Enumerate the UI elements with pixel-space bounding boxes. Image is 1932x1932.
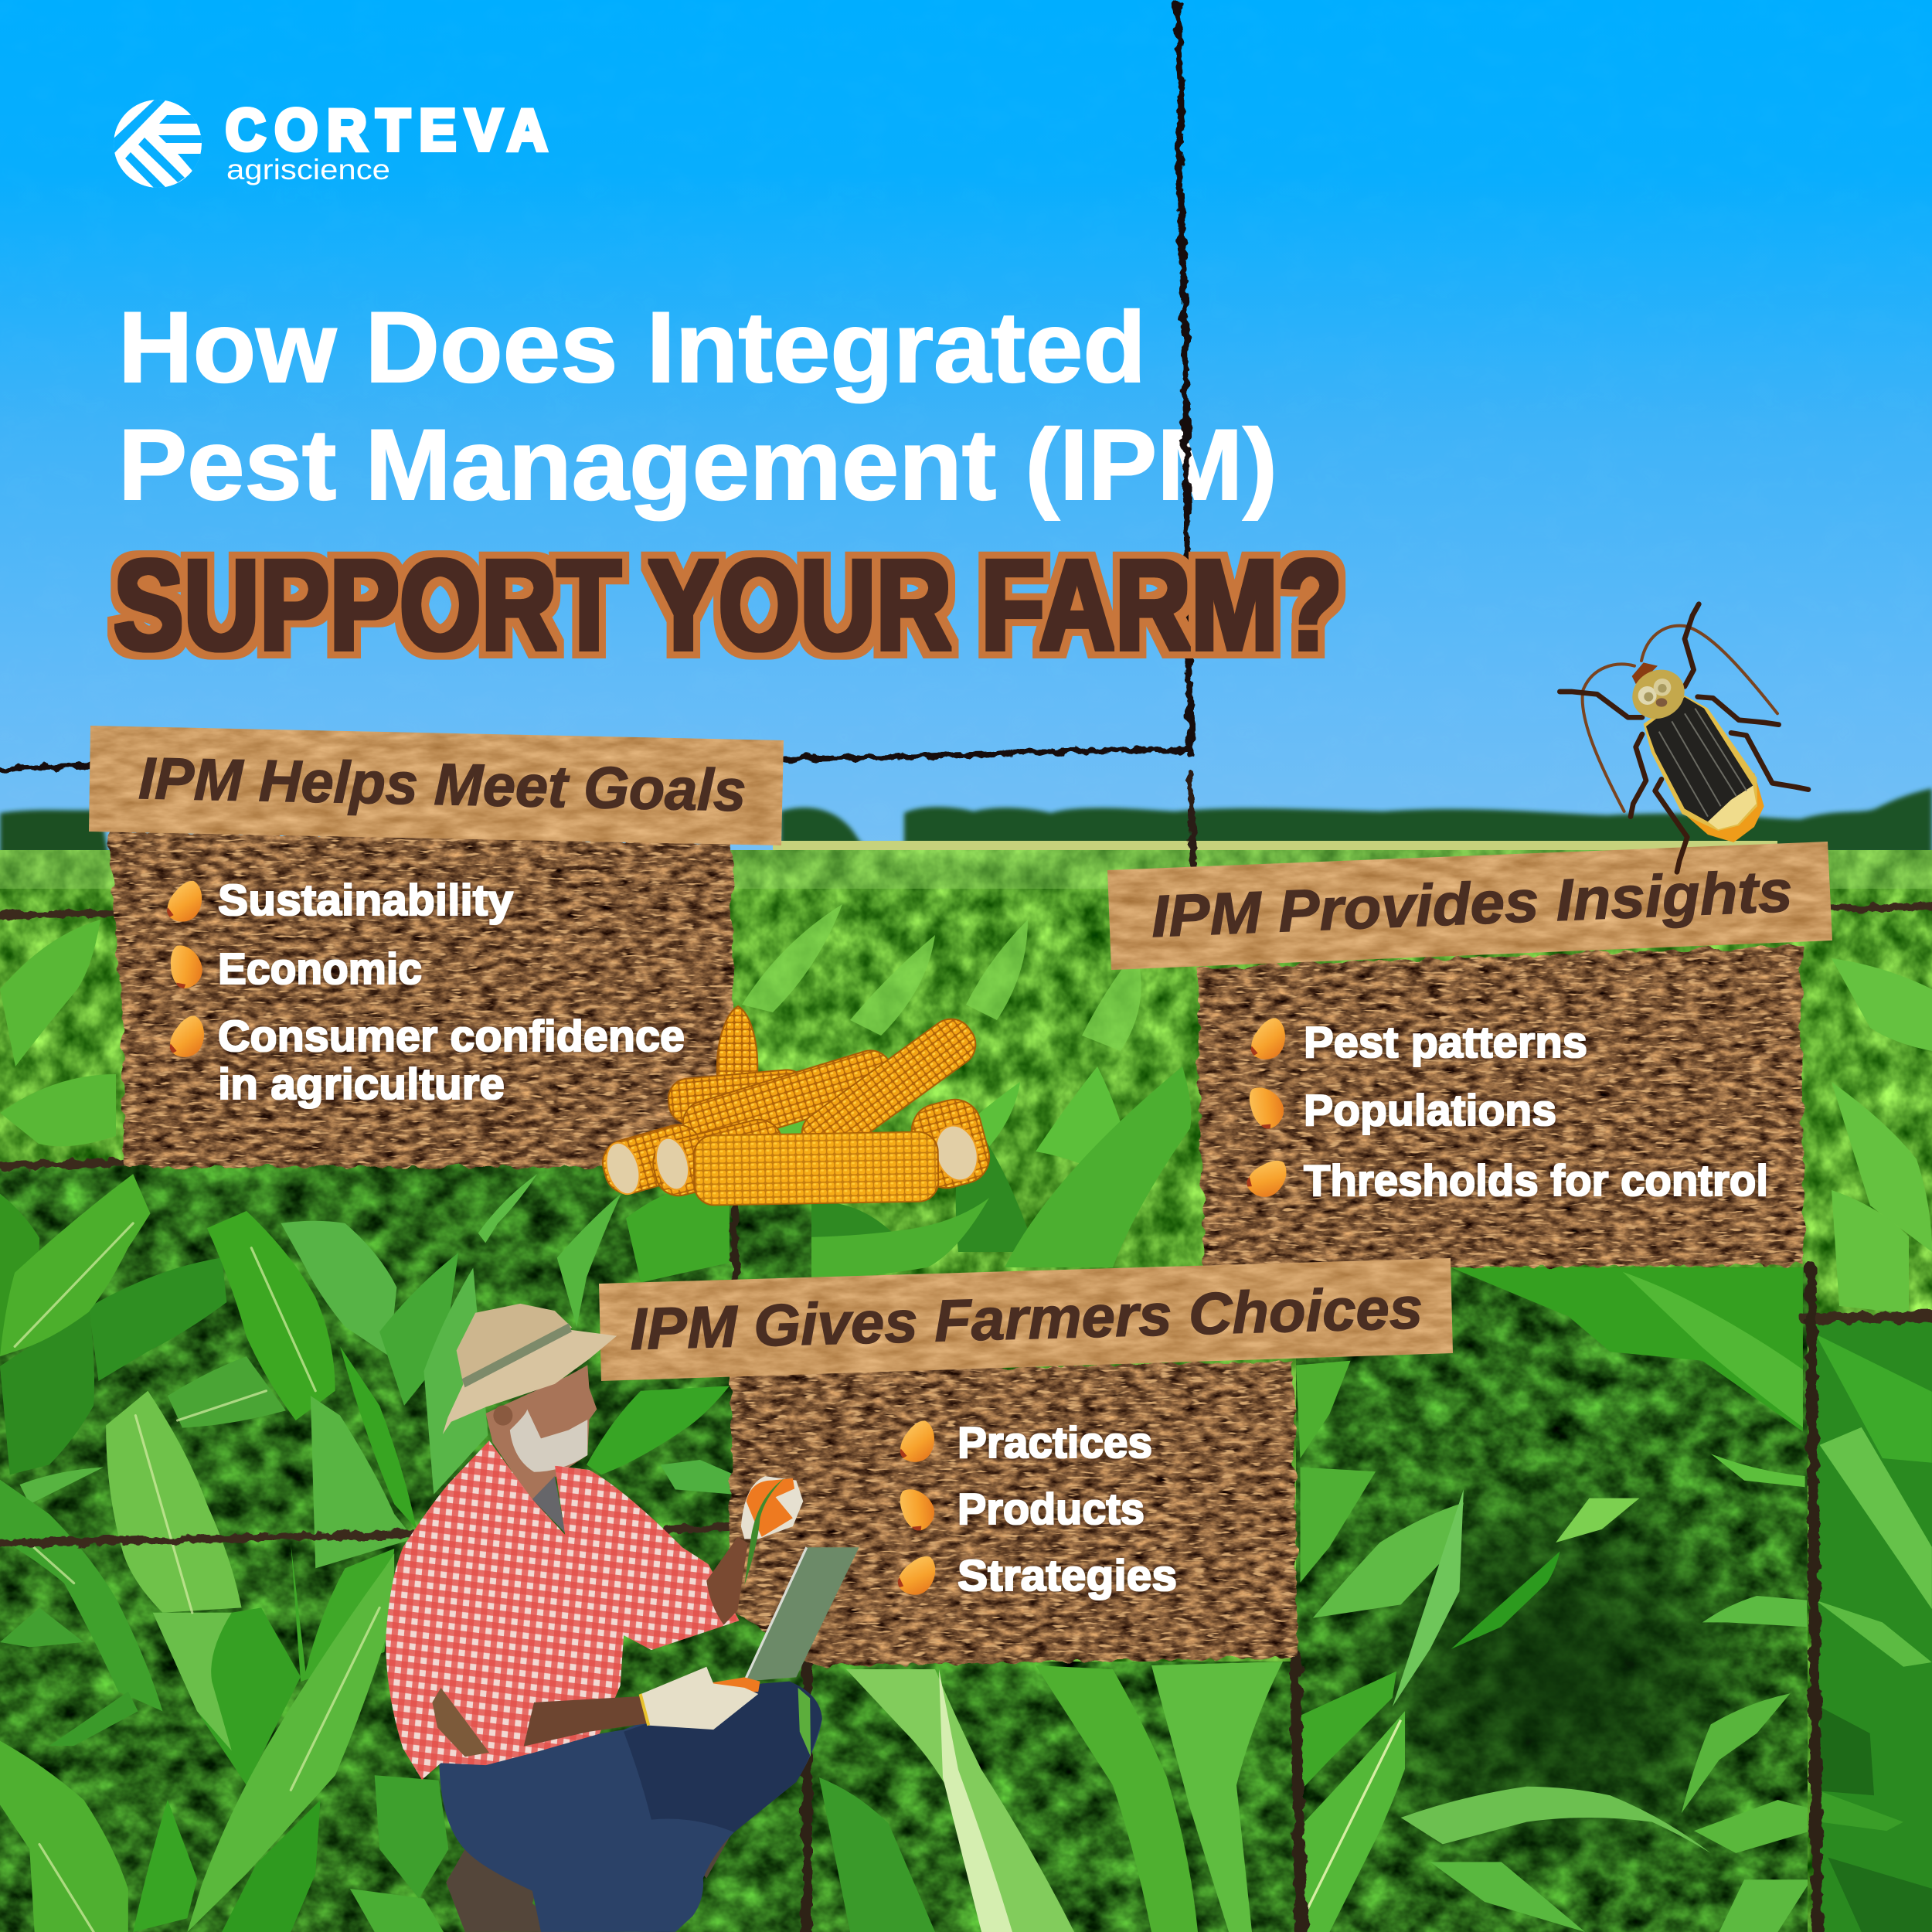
neck and face	[486, 1366, 597, 1502]
item text: Practices	[957, 1418, 1152, 1468]
cardboard heading: IPM Helps Meet Goals	[138, 746, 747, 824]
icon: corn kernel	[164, 876, 208, 927]
CORTEVA wordmark: CORTEVA	[226, 98, 547, 162]
item text: Populations	[1304, 1086, 1556, 1135]
trousers	[439, 1682, 822, 1932]
icon: corn kernel	[1240, 1080, 1291, 1133]
work glove	[641, 1667, 758, 1730]
panel: IPM Provides Insights	[1107, 842, 1832, 1269]
raised glove and leaf	[741, 1476, 803, 1585]
pale corn leaf	[846, 1669, 1074, 1932]
corn cobs pile	[597, 1006, 995, 1206]
icon: corn kernel	[167, 1012, 209, 1061]
cardboard heading	[1107, 842, 1832, 970]
ear	[493, 1406, 512, 1426]
cardboard heading	[599, 1258, 1453, 1381]
title: How Does Integrated	[118, 291, 1146, 403]
legs	[1560, 604, 1808, 872]
soil board	[1196, 946, 1804, 1269]
leaf midribs	[15, 1223, 379, 1932]
green leaf on knee	[798, 1688, 811, 1757]
head	[1632, 662, 1658, 684]
torn black seams	[0, 750, 1932, 1932]
icon: corn kernel	[894, 1549, 943, 1602]
item text: Sustainability	[218, 876, 513, 925]
logo mark	[111, 100, 205, 188]
lower forearm	[524, 1696, 648, 1747]
icon: corn kernel	[1248, 1014, 1290, 1063]
title: Pest Management (IPM)	[118, 408, 1277, 521]
vertical sky seam	[1177, 0, 1191, 757]
boots	[446, 1805, 733, 1932]
elbow patch	[432, 1688, 489, 1757]
wing covers	[1644, 696, 1757, 831]
field horizontal seams	[0, 906, 1932, 1543]
far field strip	[773, 841, 1777, 852]
item text: Consumer confidence	[218, 1012, 685, 1061]
cardboard heading	[89, 726, 784, 845]
right strip leaves	[1815, 1320, 1932, 1932]
logo	[111, 98, 547, 188]
field vertical seams	[734, 773, 1818, 1932]
corn field base	[0, 846, 1932, 1932]
farmer	[386, 1304, 859, 1932]
top field leaves	[0, 904, 1932, 1314]
icon: corn kernel	[1243, 1151, 1294, 1205]
item text: Thresholds for control	[1304, 1156, 1768, 1206]
item text: Products	[957, 1485, 1145, 1534]
bottom left large leaves	[0, 1163, 811, 1932]
title highlight: SUPPORT YOUR FARM?	[114, 534, 1342, 677]
title	[118, 291, 1277, 521]
sky horizontal seams	[0, 750, 1189, 769]
cardboard heading: IPM Provides Insights	[1150, 859, 1794, 950]
icon: corn kernel	[897, 1417, 939, 1466]
bottom middle leaves	[804, 1662, 1298, 1932]
shirt	[386, 1440, 740, 1780]
panel: IPM Gives Farmers Choices	[599, 1258, 1453, 1666]
sky background	[0, 0, 1932, 858]
soil board	[730, 1362, 1298, 1666]
leaf cluster left	[0, 1174, 734, 1932]
panel: IPM Helps Meet Goals	[89, 726, 784, 1167]
grey undershirt	[532, 1476, 565, 1532]
bottom right leaves	[1296, 1267, 1811, 1932]
laptop	[706, 1547, 859, 1692]
pronotum	[1624, 660, 1693, 728]
agriscience wordmark: agriscience	[226, 154, 390, 185]
icon: corn kernel	[162, 940, 209, 992]
abdomen tip	[1687, 773, 1764, 842]
raised forearm	[706, 1537, 748, 1625]
item text: Pest patterns	[1304, 1018, 1587, 1067]
item text: Economic	[218, 944, 422, 994]
beard	[510, 1409, 587, 1472]
antennae	[1583, 626, 1777, 811]
beetle	[1560, 604, 1808, 872]
sun hat	[443, 1304, 617, 1434]
cardboard heading: IPM Gives Farmers Choices	[629, 1275, 1423, 1362]
soil board	[108, 831, 734, 1167]
icon: corn kernel	[890, 1481, 942, 1535]
item text: in agriculture	[218, 1060, 505, 1109]
item text: Strategies	[957, 1551, 1177, 1600]
distant tree line	[0, 788, 1932, 854]
